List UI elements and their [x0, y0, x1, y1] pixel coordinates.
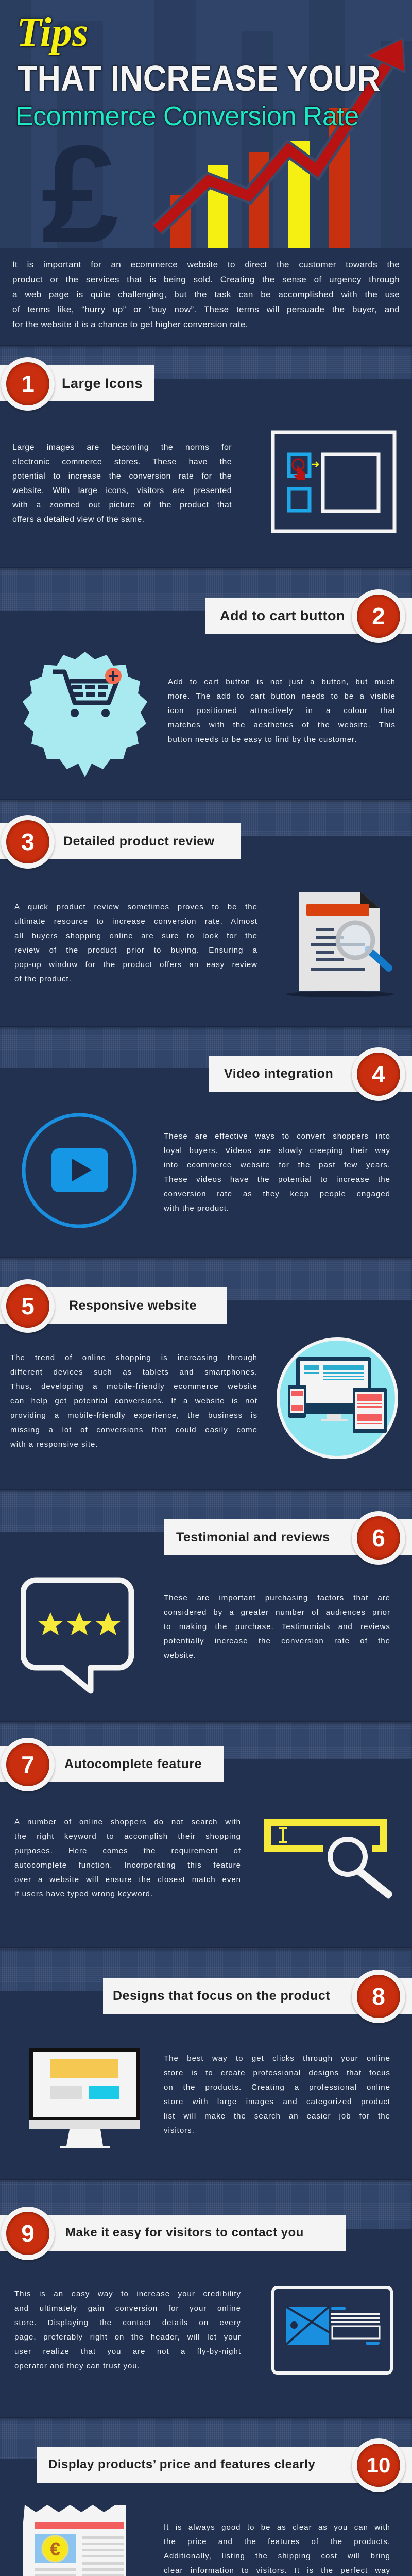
text 8: visitors. — [164, 2126, 195, 2135]
heading 9: Make it easy for visitors to contact you — [65, 2226, 304, 2240]
icon: price receipt: € — [50, 2538, 60, 2560]
heading 4 — [209, 1056, 412, 1092]
text 5: different devices such as tablets and smartphones. — [10, 1368, 258, 1377]
text 5: Thus, developing a mobile-friendly ecommerce website — [10, 1382, 258, 1391]
number 5 — [1, 1279, 55, 1333]
number 6: 6 — [372, 1524, 385, 1551]
text 3: ultimate resource to increase conversion rate. Almost — [14, 917, 258, 926]
number 1 — [1, 357, 55, 411]
icon: autocomplete search — [264, 1819, 392, 1898]
text 9: and ultimately gain conversion for your online — [14, 2304, 241, 2313]
text 8: on the products. Creating a professional online — [164, 2083, 390, 2092]
heading 4: Video integration — [224, 1066, 333, 1081]
text 4 — [164, 1132, 390, 1213]
intro text: for the website it is a chance to get higher conversion rate. — [12, 319, 248, 329]
icon: cart starburst — [23, 652, 147, 777]
icon: responsive devices — [277, 1337, 398, 1459]
arrow: rising — [157, 38, 405, 229]
number 10 — [352, 2438, 405, 2492]
text 5: missing a lot of conversions that could easily come — [10, 1426, 258, 1434]
heading 2: Add to cart button — [220, 608, 345, 623]
heading 10 — [37, 2447, 412, 2483]
heading 5: Responsive website — [69, 1298, 197, 1313]
title: main: THAT INCREASE YOUR — [18, 58, 381, 98]
number 7: 7 — [21, 1751, 35, 1778]
number 8: 8 — [372, 1983, 385, 2010]
heading 3: Detailed product review — [63, 834, 215, 849]
text 9: operator and they can trust you. — [14, 2362, 140, 2370]
number 8 — [352, 1970, 405, 2023]
text 1: electronic commerce stores. These have the — [12, 457, 232, 466]
text 7 — [14, 1818, 241, 1899]
panel: 8 Designs that focus on the product — [29, 1970, 412, 2148]
text 5: providing a mobile-friendly experience, the business is — [10, 1411, 258, 1420]
text 1: Large images are becoming the norms for — [12, 443, 232, 452]
text 4: loyal buyers. Videos are slowly creeping their way — [164, 1146, 390, 1155]
number 4 — [352, 1047, 405, 1101]
text 3: review of the product prior to buying. Ensuring a — [14, 946, 258, 955]
intro text: a web page is quite challenging, but the task can be accomplished with the use — [12, 290, 400, 299]
bar chart — [170, 108, 350, 248]
number 6 — [352, 1511, 405, 1565]
text 7: A number of online shoppers do not search with — [14, 1818, 241, 1826]
number 1: 1 — [21, 370, 35, 397]
text 2: more. The add to cart button needs to be a visible — [168, 692, 396, 701]
number 9: 9 — [21, 2220, 35, 2247]
text 6: potentially increase the conversion rate of the — [164, 1637, 390, 1646]
heading 2 — [205, 598, 412, 634]
text 6 — [164, 1594, 390, 1660]
text 4: These videos have the potential to increase the — [164, 1175, 390, 1184]
text 2: matches with the aesthetics of the website. This — [168, 721, 396, 730]
text 3: of the product. — [14, 975, 72, 984]
heading 9 — [0, 2215, 346, 2251]
intro text: of terms like, “hurry up” or “buy now”. These terms will persuade the buyer, and — [12, 304, 400, 314]
text 9: store. Displaying the contact details on every — [14, 2318, 241, 2327]
icon: contact form — [271, 2286, 393, 2375]
text 6: These are important purchasing factors that are — [164, 1594, 390, 1602]
text 1: website. With large icons, visitors are presented — [12, 486, 232, 495]
text 1: with a zoomed out picture of the product that — [12, 501, 232, 510]
text 4: into ecommerce website for the past few years. — [164, 1161, 390, 1170]
text 9 — [14, 2290, 241, 2370]
text 7: the right keyword to accomplish their shopping — [14, 1832, 241, 1841]
number 9 — [1, 2207, 55, 2260]
text 9: page, preferably right on the header, will let your — [14, 2333, 241, 2342]
title: Tips: Tips — [16, 10, 88, 55]
text 5: can help get potential conversions. If a website is not — [10, 1397, 258, 1405]
text 3: pop-up window for the product offers an easy review — [14, 960, 258, 969]
icon: monitor — [29, 2048, 140, 2148]
text 6: considered by a greater number of audiences prior — [164, 1608, 390, 1617]
text 8: store is to create professional designs that focus — [164, 2069, 390, 2077]
header banner — [0, 0, 412, 248]
text 4: with the product. — [164, 1204, 229, 1213]
text 2: icon positioned attractively in a colour that — [168, 706, 396, 715]
text 9: user realize that you are not a fly-by-night — [14, 2347, 241, 2356]
icon: review bubble with stars — [21, 1578, 134, 1694]
heading 5 — [0, 1287, 227, 1324]
text 5 — [10, 1353, 258, 1449]
text 10 — [164, 2523, 390, 2575]
text 8: store with large images and categorized product — [164, 2097, 390, 2106]
panel: 2 Add to cart button — [23, 589, 412, 777]
icon: video play circle — [22, 1113, 137, 1228]
intro text: product or the services that is being sold. Creating the sense of urgency through — [12, 275, 400, 284]
text 6: to making the purchase. Testimonials and reviews — [164, 1622, 390, 1631]
text 3: all buyers shopping online are sure to look for the — [14, 931, 258, 940]
heading 7: Autocomplete feature — [64, 1757, 202, 1771]
number 4: 4 — [372, 1061, 385, 1088]
intro text: It is important for an ecommerce website to direct the customer towards the — [12, 260, 400, 269]
text 2: button needs to be easy to find by the customer. — [168, 735, 357, 744]
panel: 10 Display products' price and features clearly — [23, 2438, 412, 2576]
heading 10: Display products’ price and features clearly — [48, 2458, 315, 2471]
panel: 4 Video integration — [22, 1047, 412, 1228]
text 7: autocomplete function. Incorporating this feature — [14, 1861, 241, 1870]
panel: 5 Responsive website — [0, 1279, 398, 1459]
text 1: potential to increase the conversion rate for the — [12, 472, 232, 481]
text 10: the price and the features of the products. — [164, 2537, 390, 2546]
number 2: 2 — [372, 603, 385, 630]
text 5: with a responsive site. — [10, 1440, 98, 1449]
heading 1: Large Icons — [62, 376, 143, 391]
panel: 3 Detailed product review — [0, 815, 394, 997]
text 9: This is an easy way to increase your credibility — [14, 2290, 241, 2298]
text 3 — [14, 903, 258, 984]
intro text — [0, 248, 412, 346]
panel: 9 Make it easy for visitors to contact you — [0, 2207, 393, 2375]
panel: 1 Large Icons — [0, 357, 397, 533]
heading 8 — [103, 1978, 412, 2014]
number 7 — [1, 1738, 55, 1791]
number 3 — [1, 815, 55, 869]
heading 8: Designs that focus on the product — [113, 1989, 330, 2003]
text 8 — [164, 2054, 390, 2135]
text 10: clear information to visitors. It is the perfect way — [164, 2566, 390, 2575]
icon: large icons frame — [271, 431, 397, 533]
text 7: over a website will ensure the closest match even — [14, 1875, 241, 1884]
text 10: Additionally, listing the shipping cost will bring — [164, 2552, 390, 2561]
text 2: Add to cart button is not just a button, but much — [168, 677, 396, 686]
text 4: conversion rate as they keep people engaged — [164, 1190, 390, 1198]
text 5: The trend of online shopping is increasing through — [10, 1353, 258, 1362]
text 8: list will make the search an easier job for the — [164, 2112, 390, 2121]
text 8: The best way to get clicks through your online — [164, 2054, 390, 2063]
panel: 7 Autocomplete feature — [0, 1738, 392, 1899]
heading 6 — [164, 1519, 412, 1555]
text 1: offers a detailed view of the same. — [12, 515, 145, 524]
heading 3 — [0, 823, 241, 859]
heading 6: Testimonial and reviews — [176, 1530, 330, 1545]
text 4: These are effective ways to convert shoppers into — [164, 1132, 390, 1141]
icon: price receipt — [23, 2505, 126, 2576]
number 10: 10 — [367, 2453, 390, 2477]
number 2 — [352, 589, 405, 643]
text 7: purposes. Here comes the requirement of — [14, 1846, 241, 1855]
text 3: A quick product review sometimes proves to be the — [14, 903, 258, 911]
icon: document with magnifier — [286, 892, 394, 997]
text 2 — [168, 677, 396, 744]
heading 7 — [0, 1746, 224, 1782]
text 1 — [12, 443, 232, 524]
number 3: 3 — [21, 828, 35, 855]
text 10: It is always good to be as clear as you can with — [164, 2523, 390, 2532]
number 5: 5 — [21, 1293, 35, 1319]
text 6: website. — [164, 1651, 196, 1660]
text 7: if users have typed wrong keyword. — [14, 1890, 153, 1899]
title: subtitle: Ecommerce Conversion Rate — [15, 101, 359, 131]
panel: 6 Testimonial and reviews — [21, 1511, 412, 1694]
heading 1 — [0, 365, 154, 401]
